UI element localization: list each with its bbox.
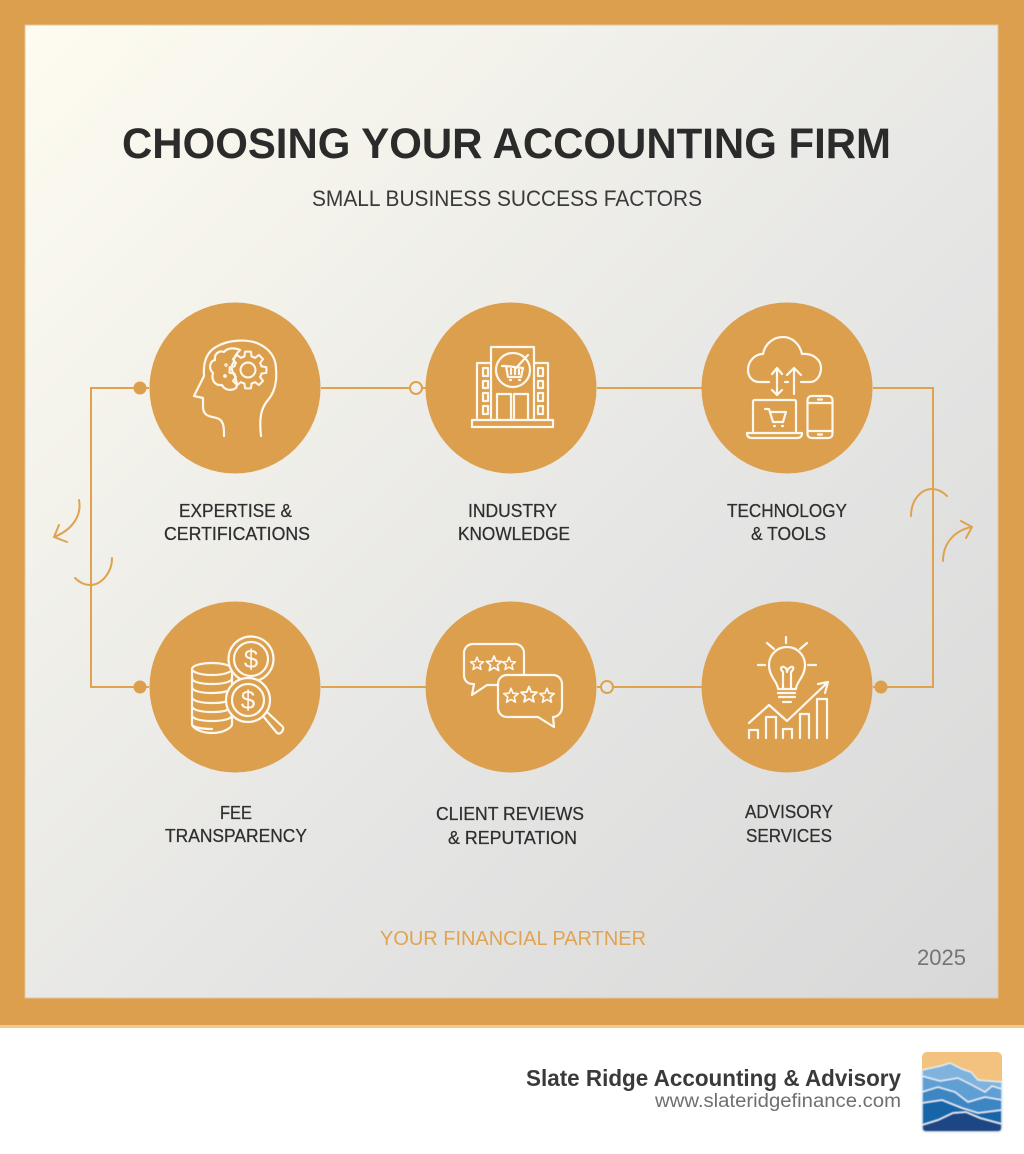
- icon: cloud and devices: [747, 337, 832, 438]
- label: [165, 802, 307, 846]
- label: & TOOLS: [751, 523, 826, 544]
- icon: dollar signs: $: [241, 685, 256, 715]
- company website: www.slateridgefinance.com: [654, 1091, 901, 1112]
- step: advisory services: [702, 602, 872, 846]
- icon: dollar signs: $: [244, 644, 259, 674]
- connector loop: [91, 382, 933, 694]
- label: KNOWLEDGE: [458, 523, 570, 544]
- step: industry knowledge: [426, 302, 596, 544]
- arrow: left cycle arrows: [54, 500, 112, 585]
- icon: speech bubbles with stars: [464, 644, 562, 727]
- step: technology and tools: [702, 302, 872, 544]
- arrow: right cycle arrows: [911, 489, 972, 561]
- icon: dollar signs: [241, 644, 259, 715]
- label: INDUSTRY: [468, 500, 557, 521]
- icon: building with cart: [472, 347, 553, 427]
- tagline: YOUR FINANCIAL PARTNER: [380, 927, 646, 950]
- label: ADVISORY: [745, 801, 833, 822]
- icon: head with brain and gear: [194, 341, 276, 436]
- label: TECHNOLOGY: [727, 500, 847, 521]
- label: [458, 500, 570, 544]
- title: CHOOSING YOUR ACCOUNTING FIRM: [122, 120, 891, 168]
- label: CERTIFICATIONS: [164, 523, 310, 544]
- year: 2025: [917, 945, 966, 970]
- step: fee transparency: [150, 602, 320, 846]
- subtitle: SMALL BUSINESS SUCCESS FACTORS: [312, 186, 702, 211]
- label: [436, 803, 584, 848]
- label: CLIENT REVIEWS: [436, 803, 584, 824]
- label: & REPUTATION: [448, 827, 577, 848]
- label: TRANSPARENCY: [165, 825, 307, 846]
- label: [745, 801, 833, 846]
- logo: mountain layers: [922, 1052, 1002, 1132]
- company name: Slate Ridge Accounting & Advisory: [526, 1065, 901, 1091]
- icon: light bulb and growth chart: [749, 637, 828, 738]
- label: EXPERTISE &: [179, 500, 293, 521]
- step: expertise and certifications: [150, 302, 320, 544]
- icon: coins and magnifier: [192, 636, 283, 734]
- label: [727, 500, 847, 544]
- label: SERVICES: [746, 825, 832, 846]
- label: FEE: [220, 802, 252, 823]
- step: client reviews and reputation: [426, 602, 596, 848]
- label: [164, 500, 310, 544]
